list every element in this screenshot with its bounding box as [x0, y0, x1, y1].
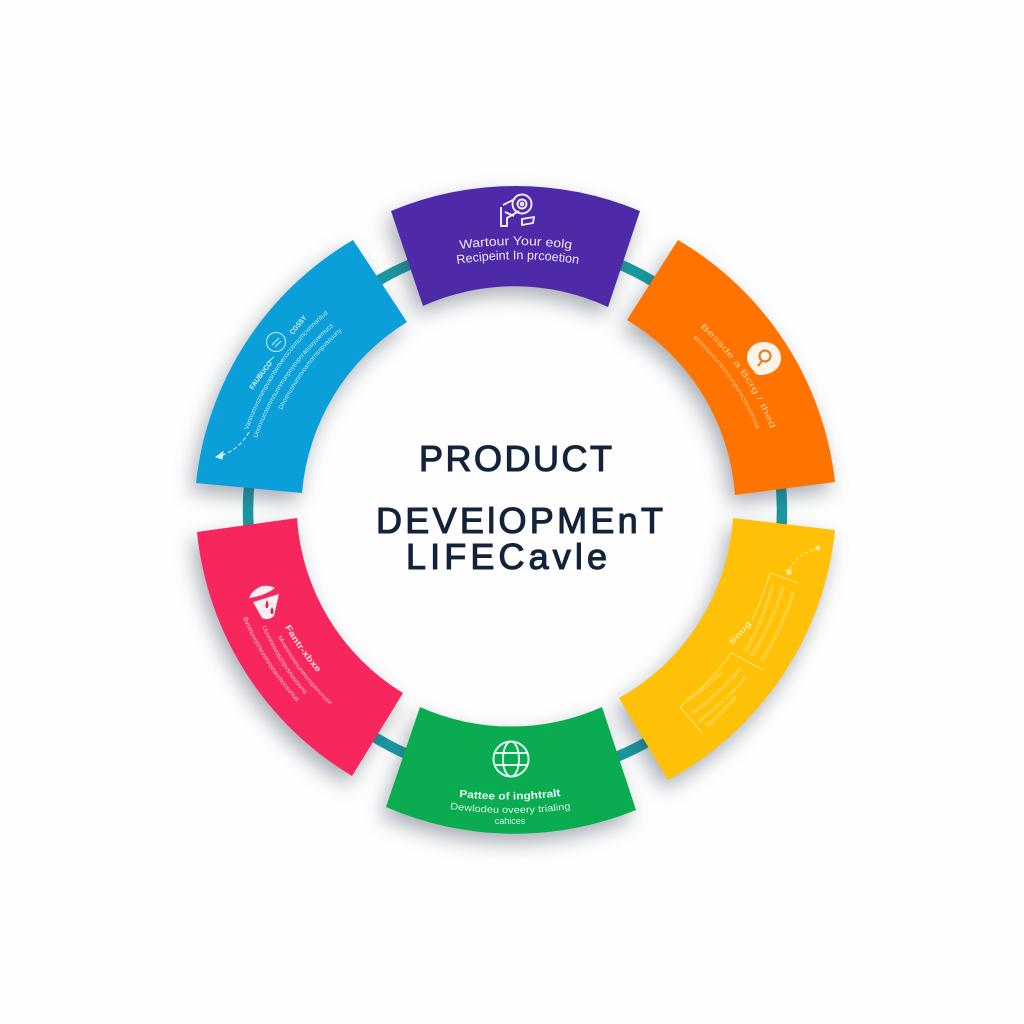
- text: pink body line 2: Uuvnnmvosznpvsnuvmvns: [262, 626, 307, 694]
- icon: location pin with magnifier: [747, 342, 781, 375]
- text: yellow heading: Snug: [730, 622, 752, 644]
- panel: green segment: [372, 707, 640, 855]
- text: purple caption second line: Recipeint In prcoetion: [456, 250, 578, 264]
- text: pink body line 3: Bvnmuvonnvuvmnsnavmonsvnua: [243, 616, 298, 702]
- text: blue heading left: FAUBUCO: [249, 362, 272, 390]
- text: orange body: Mennuvevcosnvunpvrocmnsorcoa: [694, 335, 760, 430]
- arrow: yellow dashed: [787, 546, 820, 574]
- text: blue body line 1: Vannumosznenpvasntwnvenscosmumcwnnantud: [244, 310, 328, 428]
- text box outlines: [680, 573, 798, 733]
- arrow: blue dashed: [216, 432, 249, 459]
- text: yellow body group: Scmmuvnsnmosvmnnouvarn: [760, 592, 795, 662]
- panel: pink segment: [182, 517, 405, 792]
- text: yellow body group: Uvnuonsmvou: [686, 671, 722, 702]
- title line: Lifecycle: LIFECavle: [406, 536, 607, 577]
- icon: cup with lid and drops: [249, 586, 279, 619]
- text: yellow body group: Samnuvonnmsvnuoswvn: [691, 667, 742, 714]
- panel: yellow segment: [607, 516, 840, 796]
- text: green body last line: cahices: [495, 816, 526, 826]
- text: blue heading right: CGSSY: [290, 314, 306, 334]
- panel: purple top segment: [378, 182, 644, 324]
- text: pink body line 1: Mvannvosnunmvropsnvnuor: [278, 636, 332, 704]
- text: yellow body group: Dappmmnosnvomnsovmaunn: [750, 586, 785, 657]
- connecting teal ring: [248, 243, 782, 777]
- panel: orange segment: [615, 240, 840, 514]
- title line: Product: PRODUCT: [419, 438, 612, 479]
- purple segment shape: [391, 186, 640, 307]
- green segment shape: [386, 707, 636, 834]
- text: blue body line 3: Dhosnusnunmvosmornsnpvasuuny: [278, 328, 342, 410]
- text: green heading: Pattee of inghtralt: [460, 789, 561, 802]
- title line: Development: DEVElOPMEnT: [376, 500, 663, 541]
- yellow segment shape: [619, 518, 835, 780]
- orange segment shape: [627, 240, 835, 495]
- title: [376, 438, 663, 577]
- text: green body: Dewlodeu oveery trialing: [450, 802, 570, 814]
- icon: camera device: [501, 194, 534, 226]
- pink segment shape: [197, 518, 403, 776]
- icon: globe: [494, 742, 528, 776]
- text: orange heading: Bessde a Bcrg / thed: [700, 324, 776, 428]
- text: yellow body group: Bammuvorsmmnonvsvnosa: [743, 584, 775, 652]
- text: yellow body group: Spmnuvnnas: [705, 696, 737, 728]
- text: purple caption: Wartour Your eolg: [459, 236, 572, 251]
- text: yellow body group: Bmnuvmos vnos Iuws: [698, 676, 746, 723]
- text: yellow body group: [686, 584, 795, 728]
- icon: circular badge: [266, 332, 286, 362]
- blue segment shape: [196, 240, 407, 493]
- text: blue body line 2: Uoonnucosmmnunnmunpnysvpnrasuuyuwmucs: [253, 324, 333, 438]
- text: pink heading: Fantr-xbxe: [285, 624, 320, 672]
- panel: blue segment: [181, 240, 409, 513]
